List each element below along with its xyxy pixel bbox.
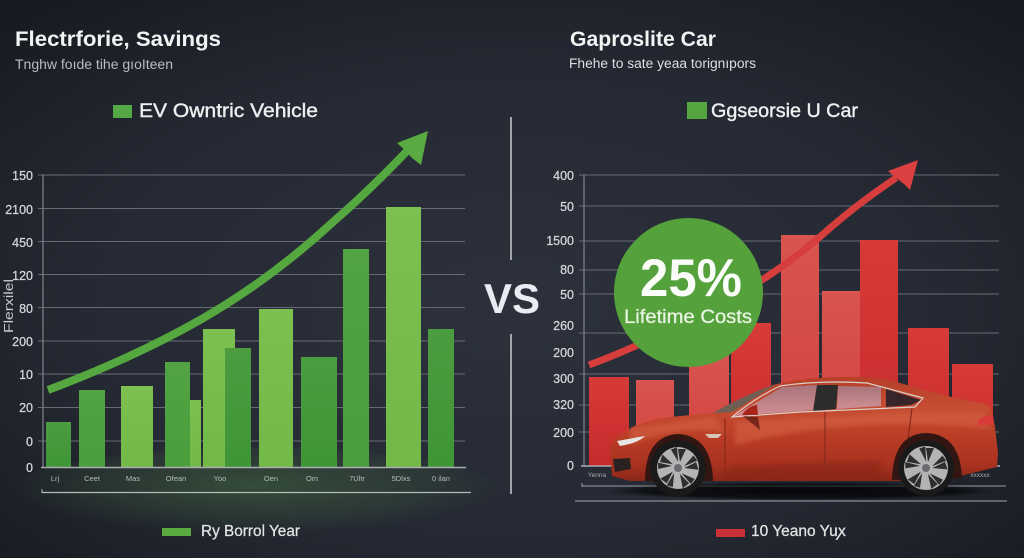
- panel: electric savings: [1, 28, 505, 543]
- arrow: green trend: [48, 131, 428, 390]
- x axis labels: 5Dlxs: [392, 474, 411, 483]
- x axis labels: 7Ultr: [349, 474, 365, 483]
- y axis labels: 120: [12, 269, 33, 283]
- callout: 25% lifetime costs: [614, 218, 763, 367]
- rear wheel: [898, 440, 954, 496]
- legend: EV: EV Owntric Vehicle: [139, 100, 318, 122]
- y axis labels: 0: [26, 435, 33, 449]
- bars: [46, 207, 454, 467]
- x axis labels: Yenna: [588, 472, 606, 479]
- grille: [613, 458, 631, 472]
- bar chart: EV: [1, 169, 505, 543]
- front window: [734, 385, 817, 416]
- x axis labels: Ofean: [166, 474, 186, 483]
- y axis labels: 300: [553, 372, 574, 386]
- x axis labels: Ceet: [84, 474, 101, 483]
- window trim: [732, 382, 923, 417]
- x axis labels: 0 ilan: [432, 474, 450, 483]
- y axis labels: [546, 169, 574, 473]
- x axis labels: [588, 472, 990, 479]
- mirror: [742, 405, 758, 415]
- windshield: [713, 384, 776, 413]
- legend: by year: Ry Borrol Year: [201, 523, 300, 540]
- y axis labels: 200: [553, 426, 574, 440]
- callout: 25% lifetime costs: 25%: [640, 249, 742, 308]
- car shadow: [605, 482, 995, 500]
- car body: [610, 377, 998, 481]
- x axis labels: Oen: [264, 474, 278, 483]
- y axis labels: 200: [12, 335, 33, 349]
- icon: red car: [605, 377, 998, 500]
- x axis labels: xxxxxx: [970, 472, 990, 479]
- x axis labels: Mas: [126, 474, 140, 483]
- x axis labels: [51, 474, 450, 483]
- y axis labels: 80: [19, 302, 33, 316]
- door seams: [725, 408, 912, 476]
- front wheel: [650, 440, 706, 496]
- body highlights: [630, 412, 990, 445]
- arrow: red trend: [589, 160, 918, 365]
- heading: right title: Gaproslite Car: [570, 28, 716, 51]
- headlight: [617, 436, 645, 446]
- y axis labels: [5, 169, 33, 475]
- tail light: [978, 415, 994, 426]
- wheel arches: [645, 434, 713, 481]
- bar chart: gasoline: [546, 169, 1007, 501]
- y axis labels: 450: [12, 236, 33, 250]
- text block: right subtitle: Fhehe to sate yeaa torignıpors: [569, 56, 756, 71]
- panel: gasoline car: [546, 28, 1007, 540]
- y axis labels: 400: [553, 169, 574, 183]
- y axis labels: 50: [560, 200, 574, 214]
- y axis labels: 320: [553, 398, 574, 412]
- b-pillar: [813, 385, 838, 411]
- y axis labels: 200: [553, 346, 574, 360]
- rear window: [837, 386, 881, 409]
- heading: left title: Flectrforie, Savings: [15, 28, 221, 51]
- y axis labels: 20: [19, 401, 33, 415]
- y axis labels: 1500: [546, 234, 574, 248]
- callout: 25% lifetime costs: Lifetime Costs: [624, 307, 752, 328]
- y axis labels: 0: [567, 459, 574, 473]
- text block: left subtitle: Tnghw foıde tihe gıoIteen: [15, 57, 173, 72]
- x axis labels: Yoo: [214, 474, 226, 483]
- divider and VS: VS: [484, 275, 540, 322]
- rear quarter glass: [886, 389, 921, 407]
- glow under chart: [5, 447, 505, 543]
- y axis title: Flerxilel: [1, 279, 16, 333]
- y axis labels: 0: [26, 461, 33, 475]
- y axis labels: 50: [560, 288, 574, 302]
- y axis labels: 150: [12, 169, 33, 183]
- legend: gasoline: Ggseorsie U Car: [711, 100, 859, 122]
- x axis labels: Lrj: [51, 474, 59, 483]
- bars: [589, 235, 993, 466]
- y axis labels: 260: [553, 319, 574, 333]
- legend: 10 years: 10 Yeano Yuꭗ: [751, 523, 846, 540]
- side vent: [705, 434, 722, 438]
- y axis labels: 10: [19, 368, 33, 382]
- y axis labels: 2100: [5, 203, 33, 217]
- y axis labels: 80: [560, 263, 574, 277]
- x axis labels: Om: [306, 474, 318, 483]
